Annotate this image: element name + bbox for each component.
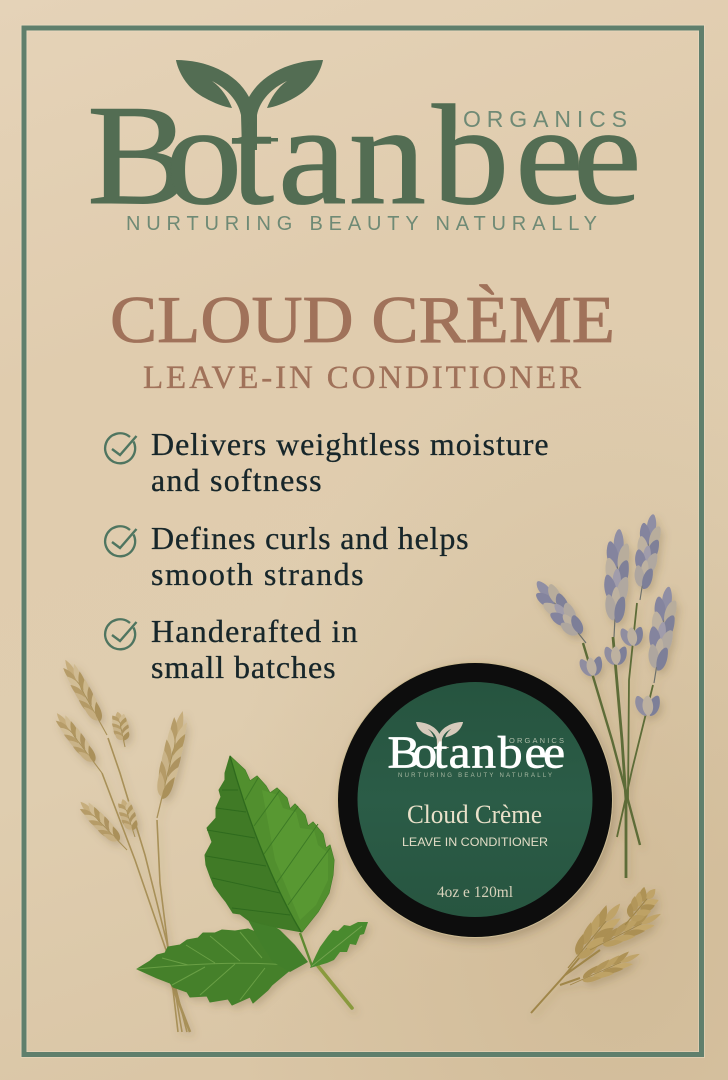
benefit 2 xyxy=(105,520,469,592)
main leaf xyxy=(205,756,334,932)
benefit 3: Handerafted in xyxy=(151,613,358,649)
jar body xyxy=(337,662,613,938)
brand logo xyxy=(87,60,642,235)
right small leaf xyxy=(310,922,368,968)
logo organics: ORGANICS xyxy=(463,106,627,132)
icon: check circle xyxy=(105,526,136,556)
nettle leaves xyxy=(137,756,368,1008)
icon: sprout leaves xyxy=(176,60,323,150)
benefit 2: Defines curls and helps xyxy=(151,520,469,556)
subtitle: LEAVE-IN CONDITIONER xyxy=(143,360,581,396)
icon: check circle xyxy=(105,619,136,649)
jar tagline: NURTURING BEAUTY NATURALLY xyxy=(398,773,552,779)
benefit 1: and softness xyxy=(151,462,322,498)
product jar xyxy=(337,662,613,938)
benefit 1 xyxy=(105,426,549,498)
benefit 1: Delivers weightless moisture xyxy=(151,426,549,462)
jar organics: ORGANICS xyxy=(509,736,564,745)
lavender sprigs xyxy=(526,512,683,878)
title: CLOUD CRÈME xyxy=(110,283,615,357)
jar label xyxy=(358,682,592,917)
logo tagline: NURTURING BEAUTY NATURALLY xyxy=(126,213,597,235)
bottom right dried sprig xyxy=(531,880,666,1013)
benefit 2: smooth strands xyxy=(151,556,364,592)
benefit 3: small batches xyxy=(151,649,336,685)
lower left leaf xyxy=(137,929,300,1005)
icon: check circle xyxy=(105,433,136,463)
dried grass sprigs xyxy=(49,655,195,1032)
jar product type: LEAVE IN CONDITIONER xyxy=(402,837,548,849)
jar product name: Cloud Crème xyxy=(407,800,542,829)
leaf stem xyxy=(318,966,352,1008)
jar size: 4oz e 120ml xyxy=(437,884,513,901)
benefits list xyxy=(105,426,549,685)
benefit 3 xyxy=(105,613,358,685)
jar logo: Botanbee xyxy=(388,728,565,778)
logo wordmark: Botanbee xyxy=(87,76,642,235)
centre small leaf xyxy=(248,918,308,972)
